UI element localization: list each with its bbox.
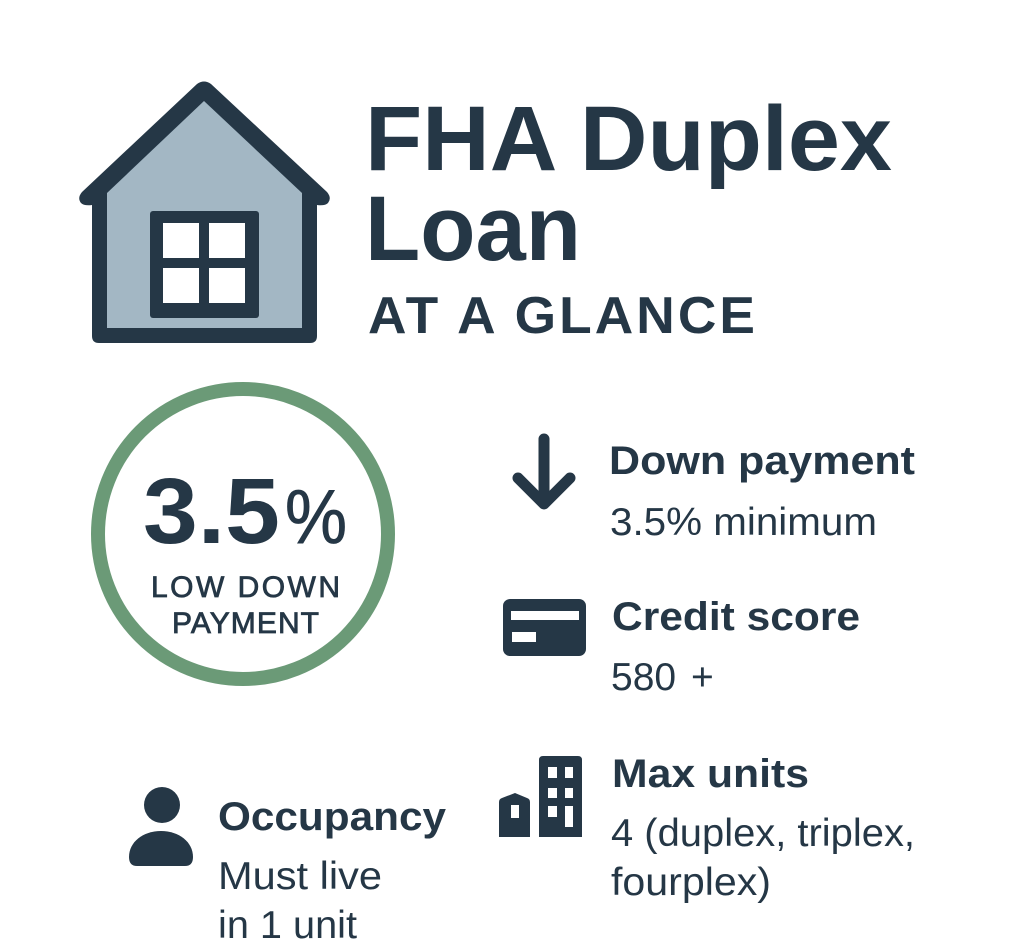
heading: down payment: Down payment xyxy=(609,439,915,483)
value: max units line 2: fourplex) xyxy=(611,861,771,904)
icon: person xyxy=(129,787,193,866)
icon: credit card xyxy=(503,599,586,656)
badge label line 1: LOW DOWN xyxy=(151,571,340,604)
icon: house xyxy=(79,82,330,343)
value: credit score: 580 xyxy=(611,656,676,699)
value: down payment: 3.5% minimum xyxy=(610,501,877,544)
title: FHA Duplex xyxy=(365,88,892,190)
heading: max units: Max units xyxy=(612,752,809,796)
icon: buildings xyxy=(499,756,582,837)
value: credit score xyxy=(611,656,714,699)
panel: low down payment badge xyxy=(98,389,388,679)
badge percentage xyxy=(143,459,347,563)
heading: occupancy: Occupancy xyxy=(218,795,447,839)
badge label line 2: PAYMENT xyxy=(172,607,319,640)
badge percentage: % xyxy=(285,475,347,560)
subtitle: AT A GLANCE xyxy=(368,287,758,345)
value: credit score: + xyxy=(691,656,714,699)
title second line: Loan xyxy=(365,178,581,280)
value: occupancy line 1: Must live xyxy=(218,855,382,898)
badge percentage: 3.5 xyxy=(143,459,280,563)
heading: credit score: Credit score xyxy=(612,595,860,639)
icon: down arrow xyxy=(518,439,570,504)
value: max units line 1: 4 (duplex, triplex, xyxy=(611,812,915,855)
